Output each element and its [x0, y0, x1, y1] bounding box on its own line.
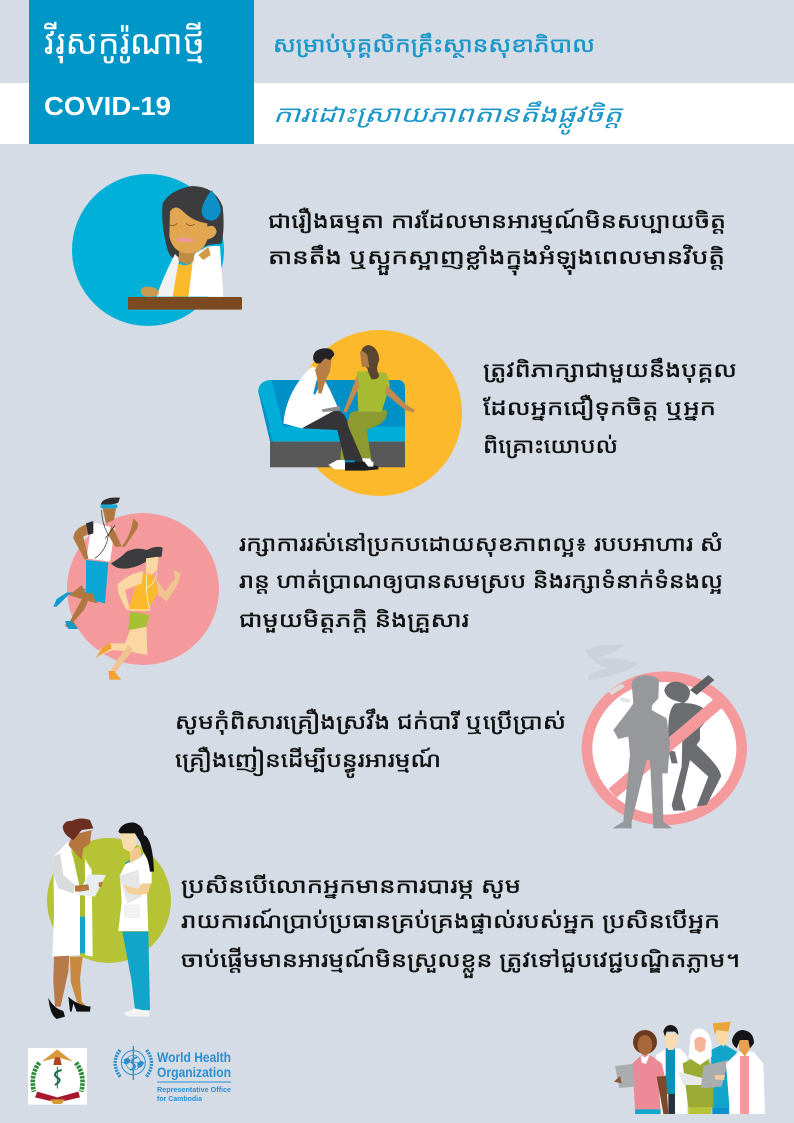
text block 3: ជាមួយមិត្តភក្តិ និងគ្រួសារ — [239, 609, 469, 634]
logo: World Health Organization — [115, 1046, 231, 1103]
text block 2: ត្រូវពិភាក្សាជាមួយនឹងបុគ្គល — [483, 359, 737, 384]
text block 3: រក្សាការរស់នៅប្រកបដោយសុខភាពល្អ៖ របបអាហារ សំ — [239, 533, 723, 558]
text block 1 — [268, 207, 726, 276]
logo: World Health Organization: Organization — [157, 1064, 231, 1080]
text block 1: តានតឹង ឬស្អួកស្អាញខ្លាំងក្នុងអំឡុងពេលមានវិបត្តិ — [268, 244, 725, 276]
logo: World Health Organization: for Cambodia — [157, 1094, 203, 1103]
icon: two people on sofa — [258, 330, 462, 496]
panel: healthy lifestyle — [53, 498, 723, 680]
logo: ministry of health — [28, 1048, 87, 1105]
icon: team of health workers — [614, 1022, 765, 1114]
panel: talk to someone — [258, 330, 737, 496]
icon: doctor and nurse — [47, 819, 171, 1019]
icon: tired health worker — [72, 174, 242, 326]
header — [0, 0, 794, 144]
logo: World Health Organization: World Health — [157, 1049, 231, 1065]
icon: no smoking or drugs sign — [585, 645, 742, 828]
text block 4: គ្រឿងញៀនដើម្បីបន្ធូរអារម្មណ៍ — [175, 746, 441, 779]
heading: COVID-19: COVID-19 — [44, 91, 171, 121]
text block 5: ចាប់ផ្តើមមានអារម្មណ៍មិនស្រួលខ្លួន ត្រូវទៅជួបវេជ្ជបណ្ឌិតភ្លាម។ — [181, 947, 740, 978]
text block 3: រាន្ត ហាត់ប្រាណឲ្យបានសមស្រប និងរក្សាទំនាក់ទំនងល្អ — [239, 570, 723, 595]
text block 5: ប្រសិនបើលោកអ្នកមានការបារម្ភ សូម — [181, 875, 521, 900]
text block 1: ជារឿងធម្មតា ការដែលមានអារម្មណ៍មិនសប្បាយចិត្ត — [268, 207, 726, 235]
text block 4 — [175, 708, 566, 779]
title: វីរុសកូរ៉ូណាថ្មី — [43, 22, 205, 64]
logo: World Health Organization: Representative Office — [157, 1085, 231, 1094]
icon: runners — [53, 498, 219, 680]
text block 3 — [239, 533, 723, 634]
panel: avoid alcohol and drugs — [175, 645, 742, 828]
text block 4: សូមកុំពិសារគ្រឿងស្រវឹង ជក់បារី ឬប្រើប្រាស់ — [175, 708, 566, 736]
panel: report concerns — [47, 819, 740, 1019]
text block 5 — [181, 875, 740, 978]
text block 2: ពិគ្រោះយោបល់ — [483, 435, 618, 459]
text block 5: រាយការណ៍ប្រាប់ប្រធានគ្រប់គ្រងផ្ទាល់របស់អ្នក ប្រសិនបើអ្នក — [181, 910, 720, 935]
text block 2 — [483, 359, 737, 459]
subtitle italic: ការដោះស្រាយភាពតានតឹងផ្លូវចិត្ត — [273, 101, 624, 135]
text block 2: ដែលអ្នកជឿទុកចិត្ត ឬអ្នក — [483, 394, 716, 422]
panel: stress is normal — [72, 174, 726, 326]
subtitle: សម្រាប់បុគ្គលិកគ្រឹះស្ថានសុខាភិបាល — [273, 34, 595, 59]
